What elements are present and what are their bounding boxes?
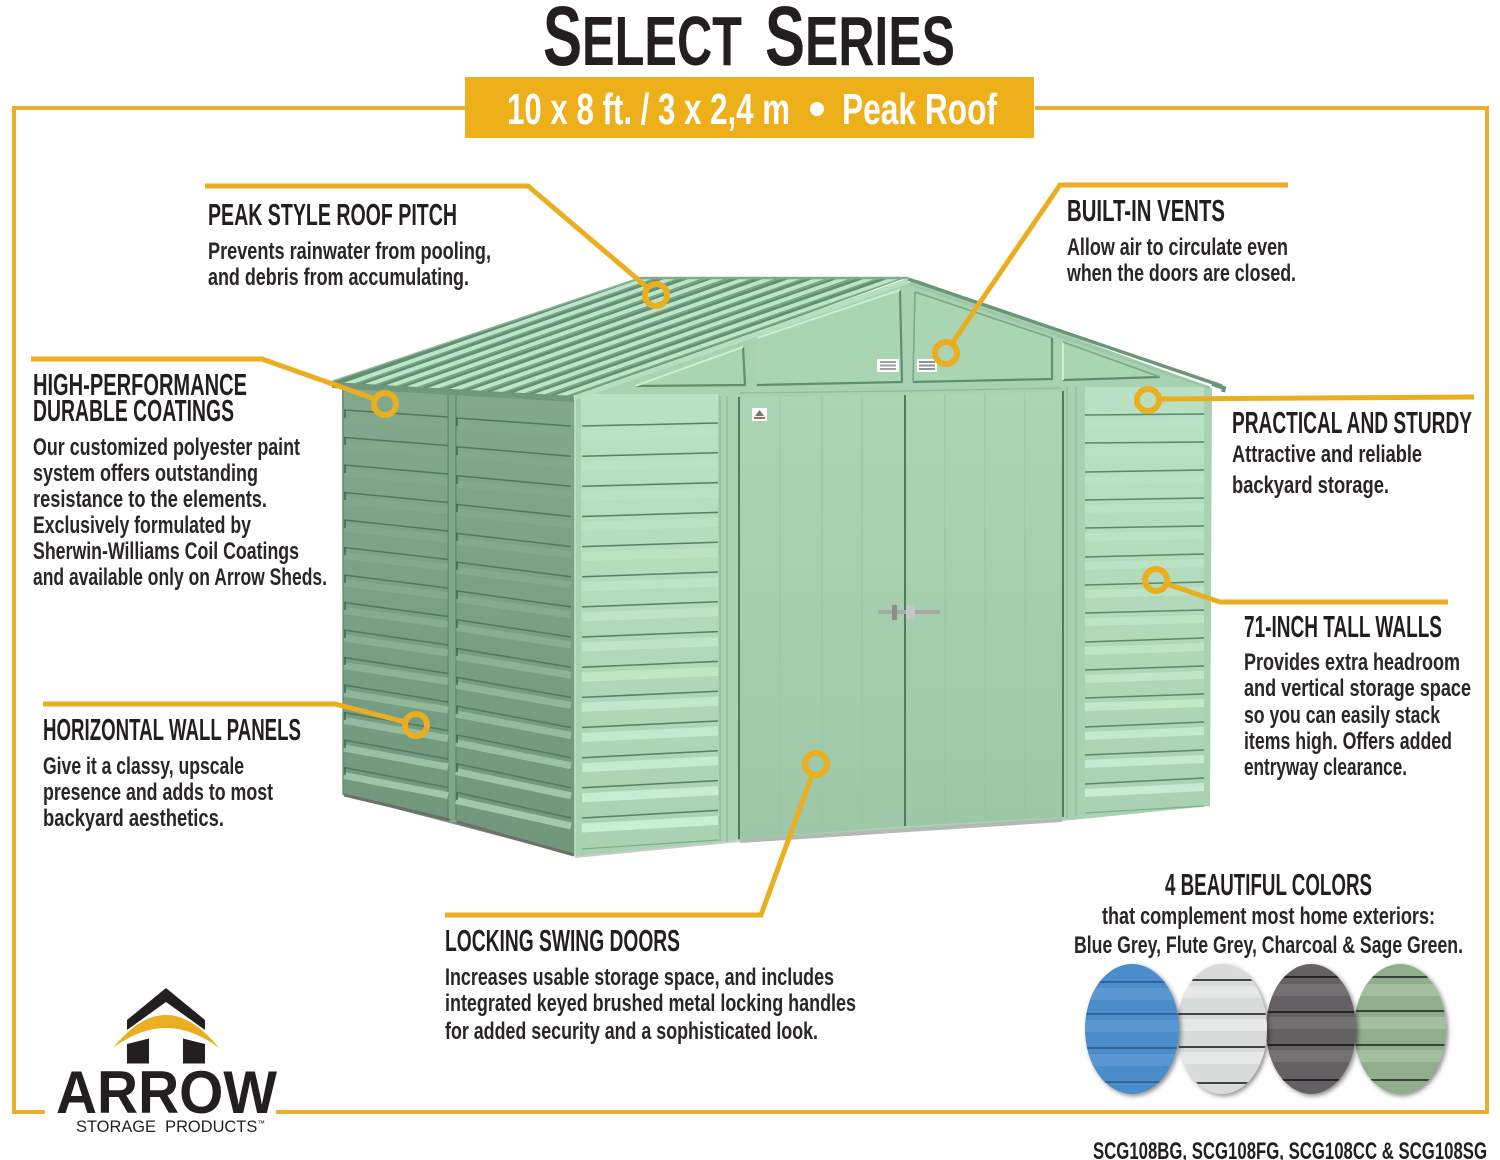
leader line and ring bbox=[445, 753, 827, 915]
callout: built-in vents: Allow air to circulate even bbox=[1067, 234, 1288, 261]
roof bbox=[331, 276, 908, 396]
front wall and gable body bbox=[575, 280, 1212, 857]
callout: locking swing doors: Increases usable storage space, and includes bbox=[445, 964, 834, 991]
callout: high-performance durable coatings: system offers outstanding bbox=[33, 460, 258, 487]
color swatches bbox=[1080, 964, 1450, 1094]
callout: high-performance durable coatings: resistance to the elements. bbox=[33, 486, 267, 513]
door logo label bbox=[752, 408, 767, 421]
leader line and ring bbox=[1145, 569, 1448, 602]
leader line and ring bbox=[205, 186, 667, 306]
title bbox=[543, 0, 955, 83]
vents bbox=[877, 359, 937, 372]
callout: high-performance durable coatings: Our customized polyester paint bbox=[33, 434, 300, 461]
callout: horizontal wall panels: Give it a classy, upscale bbox=[43, 753, 244, 780]
double swing doors bbox=[739, 391, 1063, 839]
callout: horizontal wall panels: backyard aesthetics. bbox=[43, 805, 224, 832]
callout: horizontal wall panels: presence and adds to most bbox=[43, 779, 273, 806]
callout: peak style roof pitch bbox=[205, 186, 667, 306]
swatch: sage green bbox=[1350, 964, 1450, 1094]
gable recessed panels bbox=[635, 290, 1160, 386]
swatch: charcoal bbox=[1260, 964, 1360, 1094]
callout: locking swing doors: LOCKING SWING DOORS bbox=[445, 923, 680, 958]
leader line and ring bbox=[31, 359, 396, 415]
Arrow Storage Products logo bbox=[56, 988, 277, 1136]
shed illustration bbox=[330, 262, 1224, 857]
callout: locking swing doors bbox=[445, 753, 856, 1045]
colors text block: 4 BEAUTIFUL COLORS bbox=[1165, 867, 1372, 902]
callout: horizontal wall panels: HORIZONTAL WALL PANELS bbox=[43, 712, 301, 747]
callout: high-performance durable coatings bbox=[31, 359, 396, 591]
callout: practical and sturdy: backyard storage. bbox=[1232, 472, 1389, 499]
callout: practical and sturdy: Attractive and reliable bbox=[1232, 441, 1422, 468]
banner: size and roof style: Peak Roof bbox=[842, 85, 997, 134]
colors text block bbox=[1074, 867, 1463, 959]
callout: built-in vents bbox=[935, 185, 1296, 364]
callout: high-performance durable coatings: DURABLE COATINGS bbox=[33, 393, 234, 428]
callout: peak style roof pitch: and debris from accumulating. bbox=[208, 264, 469, 291]
header beam lines bbox=[740, 388, 1062, 393]
callout: built-in vents: BUILT-IN VENTS bbox=[1067, 193, 1225, 228]
leader line and ring bbox=[43, 704, 427, 736]
swatch: flute grey bbox=[1170, 964, 1270, 1094]
Arrow Storage Products logo: STORAGE PRODUCTS bbox=[76, 1117, 264, 1136]
Arrow Storage Products logo: ™ bbox=[257, 1119, 265, 1128]
leader line and ring bbox=[935, 185, 1288, 364]
callout: high-performance durable coatings: Sherwin-Williams Coil Coatings bbox=[33, 538, 299, 565]
callout: 71-inch tall walls: entryway clearance. bbox=[1244, 754, 1407, 781]
callout: 71-inch tall walls bbox=[1145, 569, 1471, 781]
callout: peak style roof pitch: Prevents rainwater from pooling, bbox=[208, 238, 491, 265]
door handle bbox=[878, 605, 940, 620]
callout: high-performance durable coatings: HIGH-PERFORMANCE bbox=[33, 367, 247, 402]
callout: high-performance durable coatings: Exclusively formulated by bbox=[33, 512, 251, 539]
callout: built-in vents: when the doors are closed. bbox=[1066, 260, 1296, 287]
front left wall panel bbox=[581, 394, 718, 849]
left side wall bbox=[342, 388, 575, 856]
front right wall panel bbox=[1085, 387, 1204, 813]
logo house mark bbox=[113, 988, 219, 1064]
callout: locking swing doors: integrated keyed brushed metal locking handles bbox=[445, 990, 856, 1017]
swatch: blue grey bbox=[1080, 964, 1185, 1094]
callout: locking swing doors: for added security and a sophisticated look. bbox=[445, 1018, 818, 1045]
roof eave and rake trim bbox=[332, 279, 1224, 399]
Arrow Storage Products logo: ARROW bbox=[56, 1059, 277, 1126]
callout: practical and sturdy bbox=[1137, 389, 1474, 499]
banner: size and roof style bbox=[465, 77, 1034, 138]
banner: size and roof style: 10 x 8 ft. / 3 x 2,4 m bbox=[507, 85, 790, 134]
callout: peak style roof pitch: PEAK STYLE ROOF PITCH bbox=[208, 197, 457, 232]
callout: high-performance durable coatings: and available only on Arrow Sheds. bbox=[33, 564, 327, 591]
leader line and ring bbox=[1137, 389, 1474, 411]
callout: horizontal wall panels bbox=[43, 704, 427, 832]
